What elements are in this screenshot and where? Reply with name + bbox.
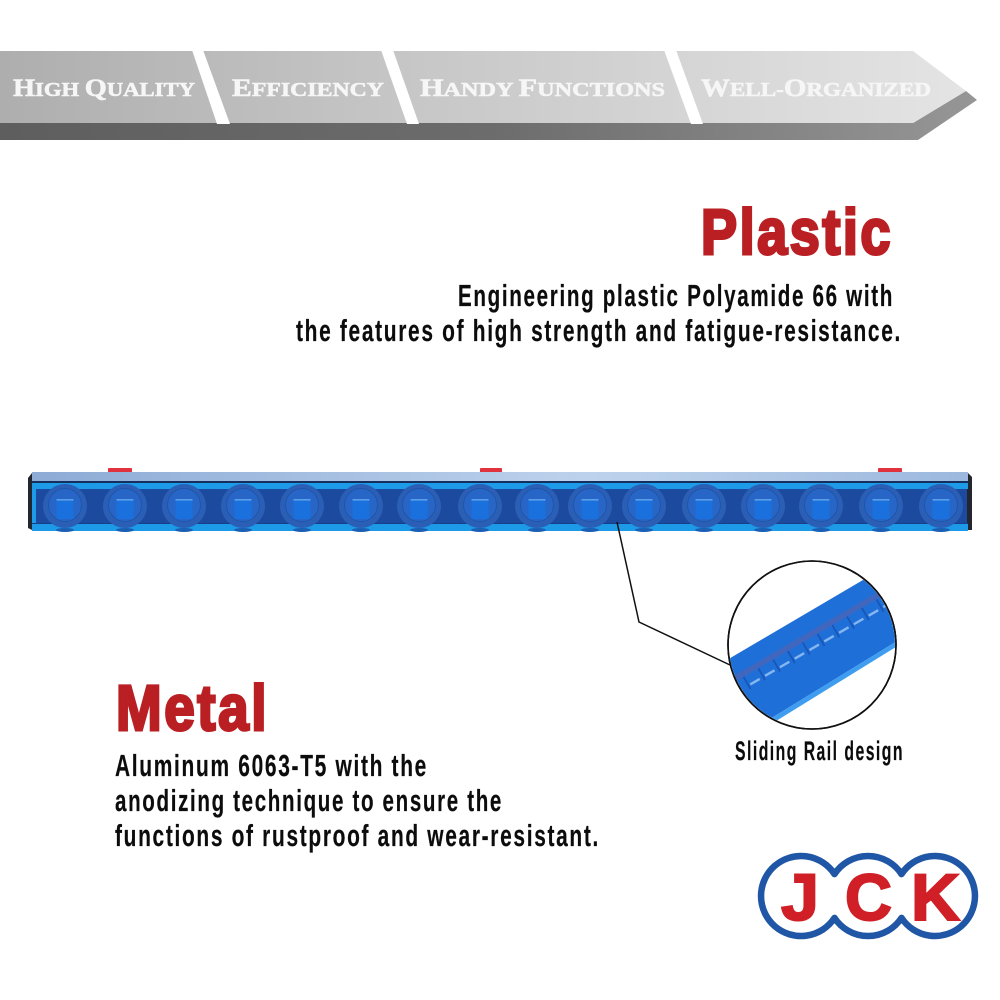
callout leader line <box>617 522 730 665</box>
banner label: high quality: HIGH QUALITY <box>13 75 196 102</box>
logo letters <box>781 860 960 934</box>
metal description: Aluminum 6063-T5 with the <box>115 748 428 783</box>
metal description: functions of rustproof and wear-resistant. <box>115 818 600 853</box>
banner label: handy functions: HANDY FUNCTIONS <box>420 75 665 102</box>
rail top face <box>32 472 968 481</box>
banner label: well-organized: WELL- ORGANIZED <box>701 75 931 102</box>
red clips <box>108 468 902 473</box>
banner shadow band <box>0 91 977 140</box>
logo outline <box>761 856 975 936</box>
rail end caps <box>28 472 972 530</box>
socket holders <box>43 484 963 532</box>
header arrow banner <box>0 50 977 140</box>
banner face <box>0 51 966 123</box>
magnified sliding rail circle <box>727 560 897 730</box>
plastic description <box>296 278 902 348</box>
metal description <box>115 748 600 853</box>
plastic heading: Plastic <box>701 196 893 268</box>
JCK logo <box>761 856 975 936</box>
logo letters: J <box>781 860 819 934</box>
metal heading: Metal <box>116 672 269 744</box>
rail channel <box>34 489 967 524</box>
banner label: efficiency: EFFICIENCY <box>232 75 385 102</box>
logo letters: K <box>911 860 960 934</box>
rail lower lip <box>32 524 968 531</box>
socket rail product <box>28 468 972 532</box>
metal description: anodizing technique to ensure the <box>115 783 503 818</box>
logo letters: C <box>845 860 892 934</box>
